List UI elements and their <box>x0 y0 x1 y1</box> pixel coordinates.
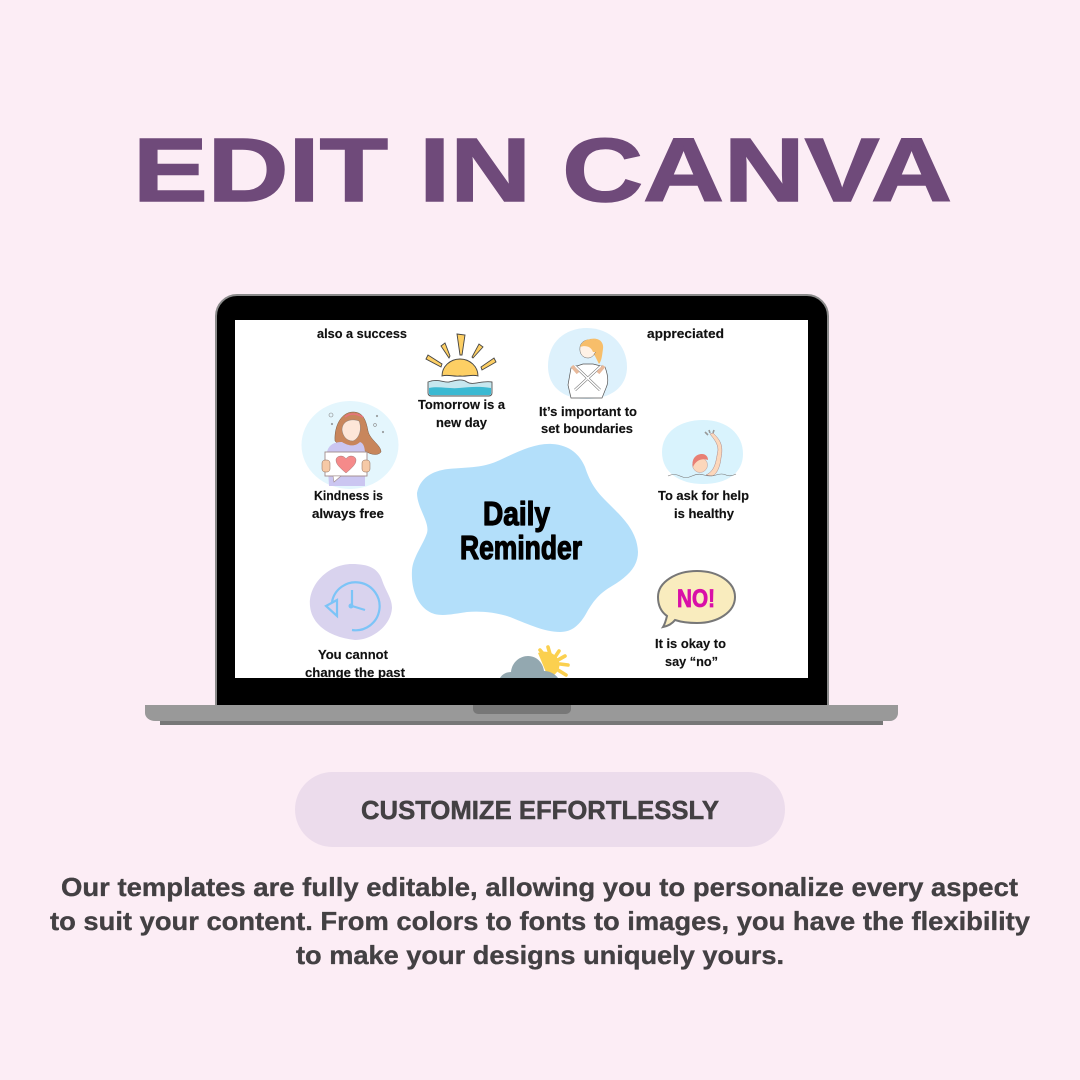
label: ask for help <box>658 489 749 521</box>
label: ask for help: To ask for help <box>658 489 749 503</box>
title: EDIT IN CANVA <box>133 121 952 221</box>
label: tomorrow: new day <box>436 416 487 430</box>
label: boundaries: set boundaries <box>541 422 633 436</box>
icon: girl holding heart sign <box>302 401 398 489</box>
label: boundaries <box>539 405 637 436</box>
laptop base <box>145 705 898 725</box>
label: kindness: Kindness is <box>314 489 383 503</box>
icon: clock rewind <box>310 564 392 640</box>
call-to-action pill <box>295 772 785 847</box>
call-to-action pill: CUSTOMIZE EFFORTLESSLY <box>361 795 719 825</box>
label: tomorrow <box>418 398 506 430</box>
icon: no speech bubble <box>658 571 735 627</box>
central heading <box>460 495 582 566</box>
icon: no speech bubble: NO! <box>677 585 715 613</box>
label: kindness <box>312 489 384 521</box>
label: okay to say no: say “no” <box>665 655 718 669</box>
icon: cloud and sun <box>500 647 568 678</box>
description text: to make your designs uniquely yours. <box>296 940 784 970</box>
icon: woman setting boundaries <box>548 328 627 399</box>
description text <box>50 872 1031 970</box>
laptop screen <box>235 320 808 680</box>
label: cannot change the past <box>305 648 406 680</box>
central heading: Reminder <box>460 529 582 566</box>
label: cannot change the past: You cannot <box>318 648 389 662</box>
label: kindness: always free <box>312 507 384 521</box>
central heading: Daily <box>483 495 551 532</box>
label: tomorrow: Tomorrow is a <box>418 398 506 412</box>
icon: swimmer asking for help <box>662 420 743 484</box>
lower bezel <box>217 678 827 705</box>
laptop mockup <box>145 295 898 725</box>
label: ask for help: is healthy <box>674 507 734 521</box>
label: okay to say no <box>655 637 726 669</box>
description text: to suit your content. From colors to fonts to images, you have the flexibility <box>50 906 1031 936</box>
label: boundaries: It’s important to <box>539 405 637 419</box>
label: okay to say no: It is okay to <box>655 637 726 651</box>
label: appreciated: appreciated <box>647 327 724 341</box>
label: cannot change the past: change the past <box>305 666 406 680</box>
description text: Our templates are fully editable, allowing you to personalize every aspect <box>61 872 1018 902</box>
laptop lid <box>216 295 828 705</box>
label: success: also a success <box>317 327 407 341</box>
central blob <box>412 444 638 632</box>
icon: sunrise <box>426 334 496 396</box>
